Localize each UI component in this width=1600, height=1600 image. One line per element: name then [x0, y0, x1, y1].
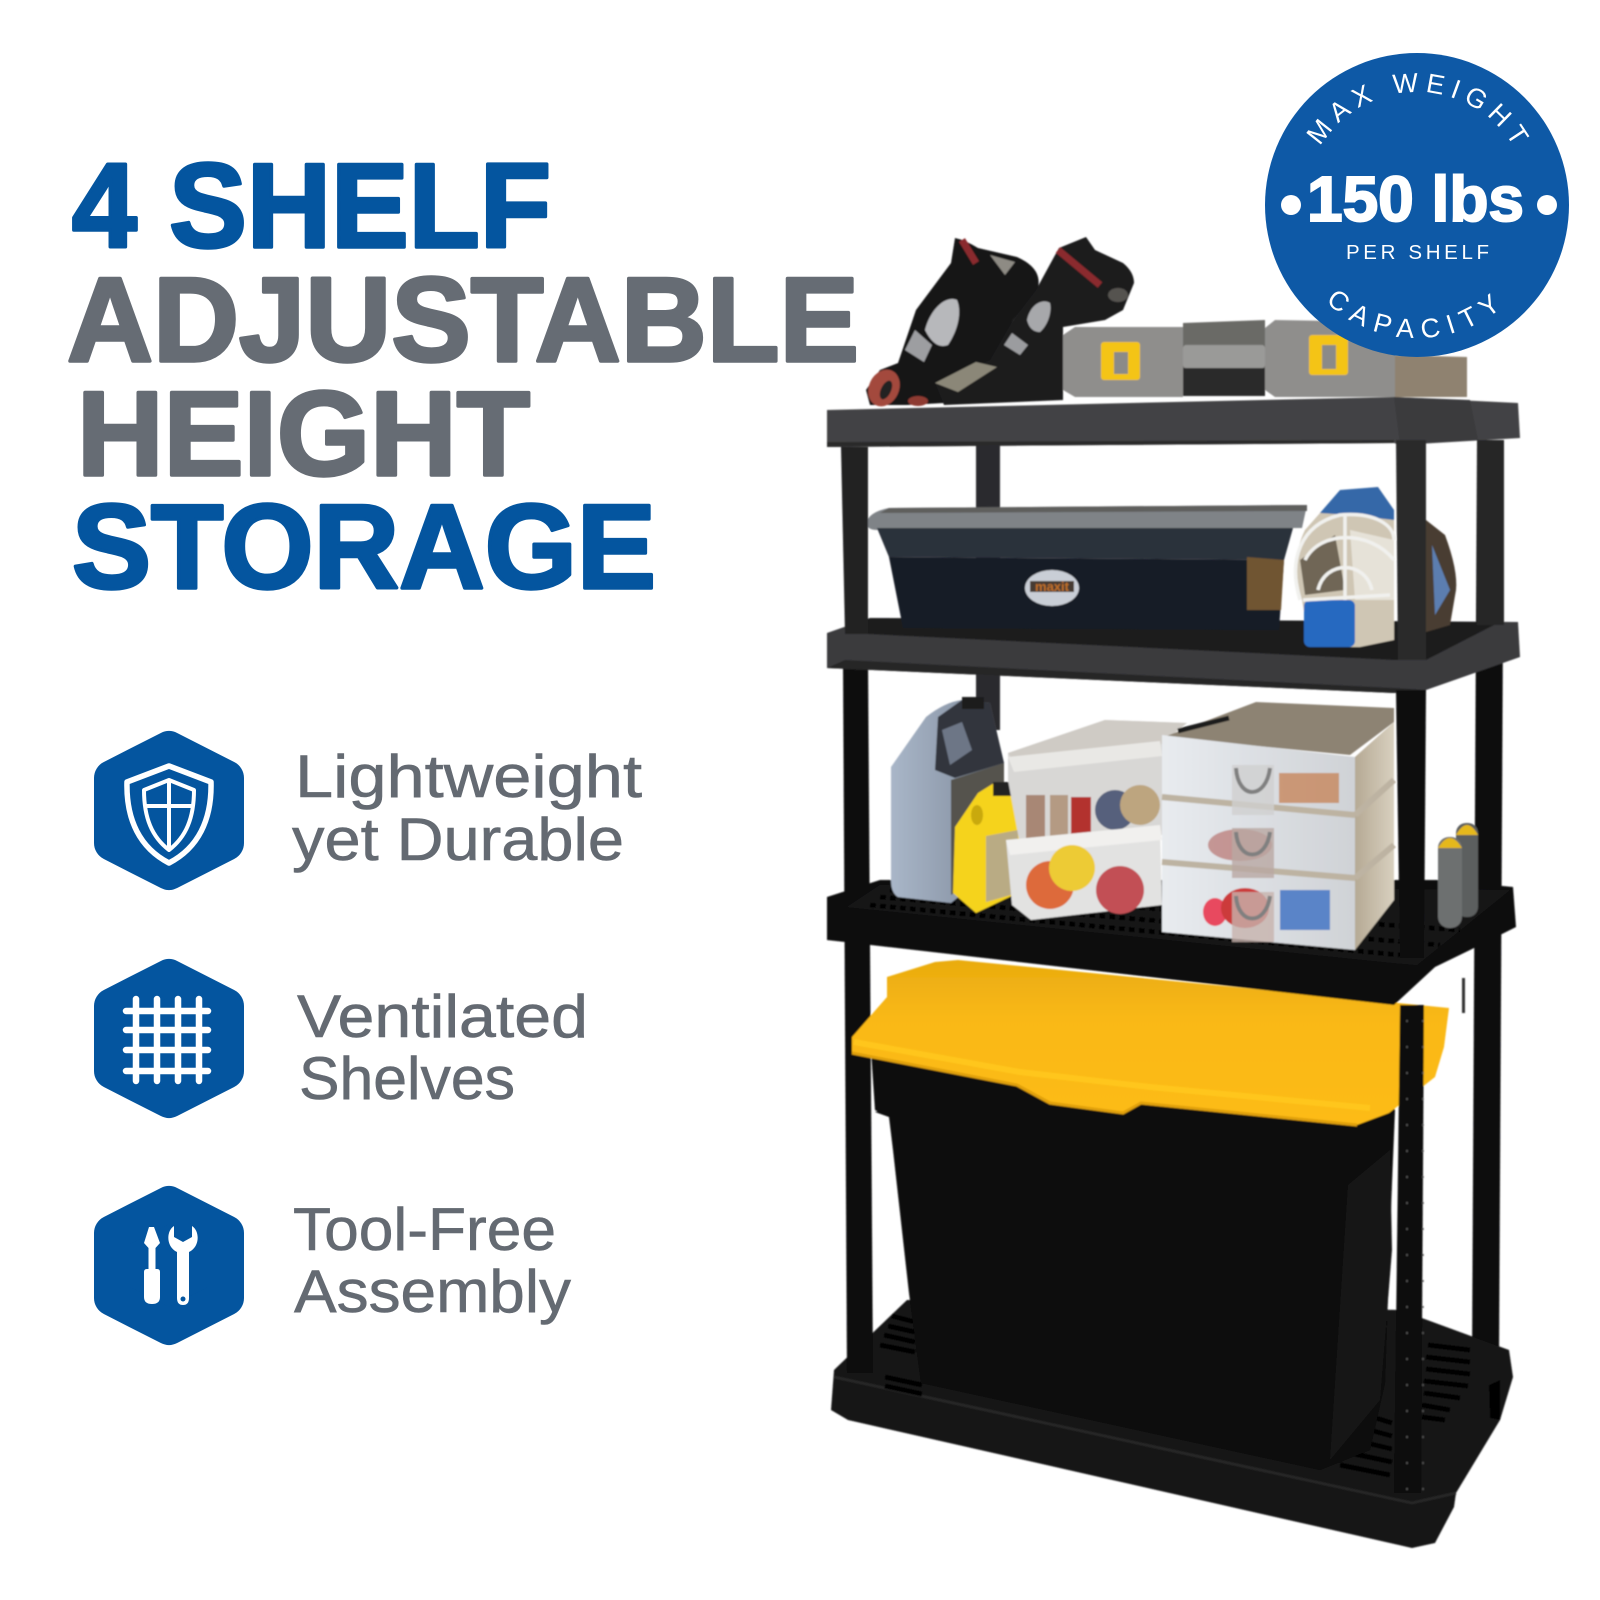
badge: max weight capacity	[1265, 53, 1569, 357]
shallow storage tote	[866, 505, 1307, 630]
label: tool-free assembly	[293, 1196, 571, 1325]
badge arc text top: MAX WEIGHT	[1306, 73, 1530, 144]
bottle: motor oil jug	[891, 697, 1004, 903]
badge arc text bottom: CAPACITY	[1330, 292, 1496, 338]
tote logo: maxit	[1035, 579, 1070, 594]
skate left	[862, 238, 1039, 412]
feature: tool-free assembly	[112, 1196, 571, 1327]
bottom shelf base	[831, 1300, 1513, 1548]
cardboard box	[1390, 355, 1467, 397]
bottle: yellow jug	[953, 782, 1020, 913]
title: ADJUSTABLE	[67, 253, 859, 387]
clear storage boxes	[1006, 720, 1187, 920]
toolbox latch right	[1309, 335, 1348, 375]
second shelf	[827, 618, 1520, 693]
storage bin yellow lid	[852, 960, 1449, 1125]
label: ventilated shelves	[297, 983, 588, 1112]
title: 4 SHELF	[72, 139, 551, 273]
feature: lightweight yet durable	[112, 743, 642, 873]
title: HEIGHT	[77, 367, 530, 501]
three-drawer organizer	[1162, 702, 1394, 950]
badge subtext: PER SHELF	[1346, 241, 1489, 264]
top shelf	[827, 397, 1520, 447]
skate right	[935, 237, 1134, 405]
toolbox	[1063, 320, 1395, 397]
label: ventilated shelves: Ventilated	[297, 983, 588, 1050]
label: lightweight yet durable: yet Durable	[292, 806, 624, 873]
product photo: shelving unit	[827, 237, 1520, 1548]
badge value: 150 lbs	[1307, 163, 1524, 235]
toolbox latch left	[1101, 342, 1140, 380]
label: ventilated shelves: Shelves	[299, 1045, 515, 1112]
inline skates	[862, 237, 1134, 412]
front-left post	[843, 660, 873, 1373]
back-right post upper	[1477, 440, 1504, 625]
label: tool-free assembly: Tool-Free	[293, 1196, 556, 1263]
label: lightweight yet durable: Lightweight	[295, 743, 642, 810]
back posts	[976, 440, 1504, 1362]
storage bin body	[871, 1050, 1395, 1470]
label: tool-free assembly: Assembly	[294, 1258, 571, 1325]
icon: grid	[112, 977, 226, 1100]
tote logo	[1025, 570, 1079, 606]
title	[67, 139, 859, 614]
title: STORAGE	[72, 480, 656, 614]
screwdrivers	[1438, 823, 1478, 1013]
third shelf	[827, 880, 1516, 1005]
goalie helmet	[1296, 487, 1456, 647]
icon: screwdriver and wrench	[112, 1204, 226, 1327]
icon: shield	[112, 749, 226, 872]
front-right post	[1394, 440, 1426, 1493]
front-left post upper	[841, 447, 868, 634]
label: lightweight yet durable	[292, 743, 642, 873]
feature: ventilated shelves	[112, 977, 588, 1112]
